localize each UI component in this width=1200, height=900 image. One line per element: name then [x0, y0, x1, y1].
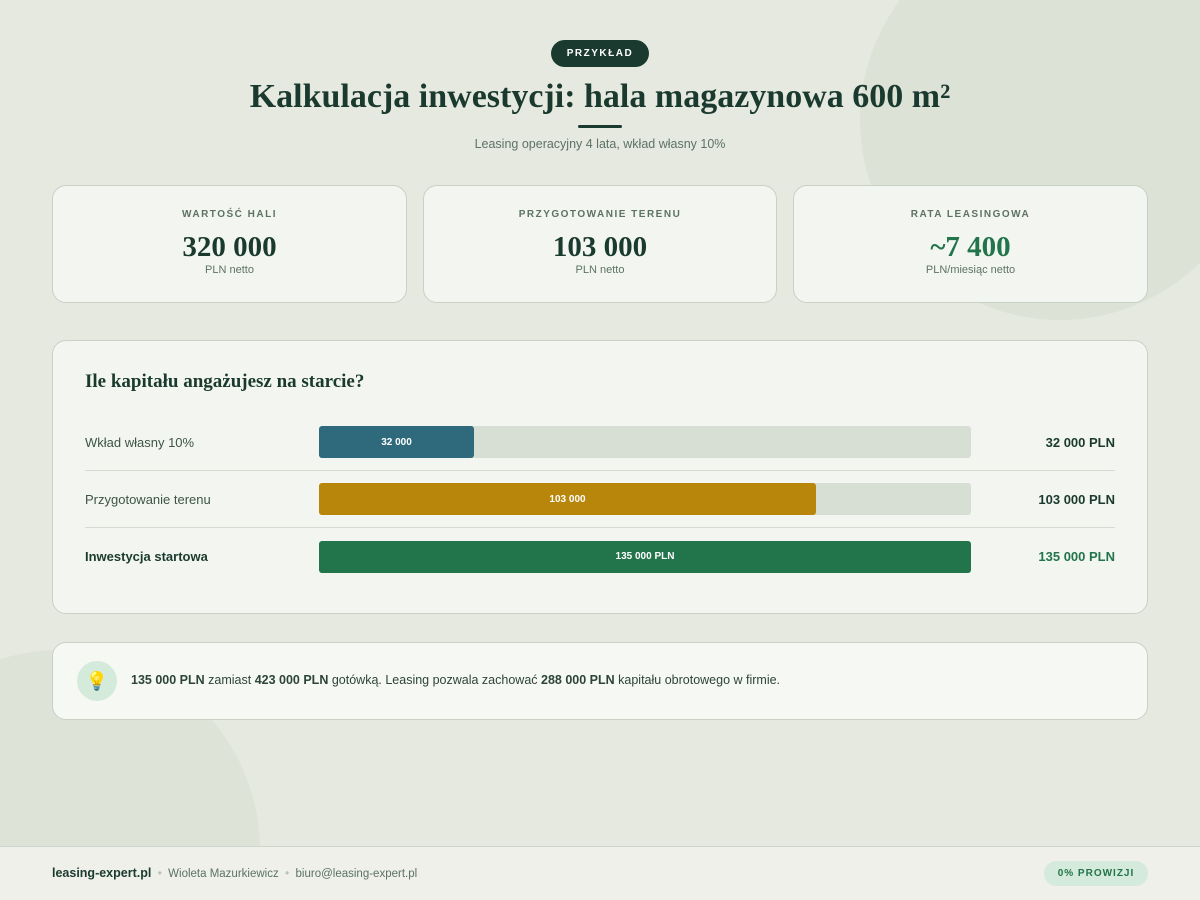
badge [551, 40, 649, 67]
bar row: wkład [85, 414, 1115, 471]
card: rata leasingowa: RATA LEASINGOWA [911, 209, 1030, 220]
callout [52, 642, 1148, 720]
bar row: total [85, 541, 1115, 573]
bar row: teren: 103 000 [549, 494, 586, 504]
subtitle: Leasing operacyjny 4 lata, wkład własny 10% [475, 137, 725, 151]
bar row: teren [85, 471, 1115, 528]
card: wartość hali: WARTOŚĆ HALI [182, 209, 277, 220]
card: wartość hali: PLN netto [205, 264, 254, 276]
card: rata leasingowa: ~7 400 [930, 231, 1011, 263]
card: przygotowanie terenu [423, 185, 777, 303]
card: wartość hali [52, 185, 407, 303]
bar row: wkład: 32 000 [381, 436, 412, 448]
icon: bulb [77, 661, 117, 701]
bar row: total: 135 000 PLN [616, 551, 674, 562]
badge: PRZYKŁAD [567, 48, 633, 59]
bar row: teren: Przygotowanie terenu [85, 492, 211, 506]
chart heading: Ile kapitału angażujesz na starcie? [85, 371, 364, 392]
footer [0, 846, 1200, 900]
bar row: teren: 103 000 PLN [1038, 492, 1115, 506]
bar row: total: Inwestycja startowa [85, 549, 208, 564]
panel: capital chart [52, 340, 1148, 614]
badge: 0% prowizji: 0% PROWIZJI [1058, 868, 1134, 879]
badge: 0% prowizji [1044, 861, 1148, 886]
bar row: total: 135 000 PLN [1038, 549, 1115, 564]
bar row: wkład: 32 000 PLN [1046, 434, 1115, 450]
card: przygotowanie terenu: 103 000 [553, 231, 647, 263]
card: rata leasingowa [793, 185, 1148, 303]
title: Kalkulacja inwestycji: hala magazynowa 600 m² [250, 78, 950, 115]
bar row: wkład: Wkład własny 10% [85, 434, 194, 450]
icon: bulb: 💡 [86, 671, 108, 691]
card: rata leasingowa: PLN/miesiąc netto [926, 264, 1015, 276]
card: przygotowanie terenu: PLN netto [576, 264, 624, 276]
card: przygotowanie terenu: PRZYGOTOWANIE TERENU [519, 209, 681, 220]
card: wartość hali: 320 000 [182, 231, 277, 263]
footer: leasing-expert.pl • Wioleta Mazurkiewicz • biuro@leasing-expert.pl [52, 866, 417, 880]
callout: 135 000 PLN zamiast 423 000 PLN gotówką. Leasing pozwala zachować 288 000 PLN kapitału obrotowego w firmie. [131, 673, 780, 687]
